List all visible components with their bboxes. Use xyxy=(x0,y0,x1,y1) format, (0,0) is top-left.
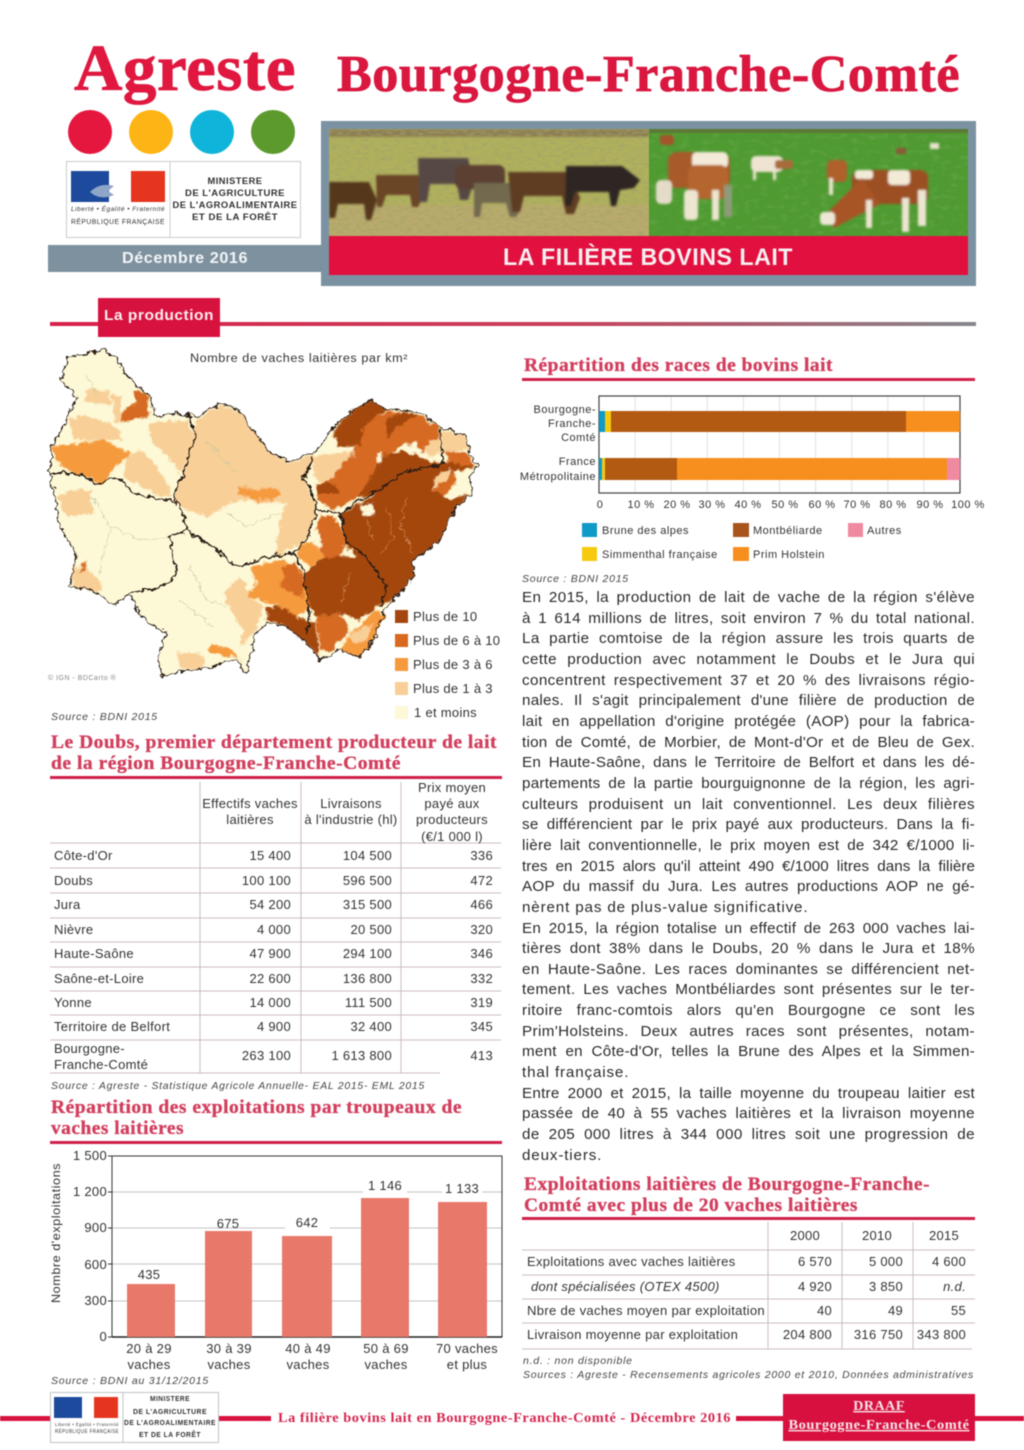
header panel xyxy=(321,121,976,286)
table: departments: Nièvre xyxy=(54,922,93,937)
photo: red and white cows xyxy=(649,129,968,236)
body text: concentrent respectivement 37 et 20 % des livraisons régio- xyxy=(522,672,975,689)
table: departments: 332 xyxy=(470,971,493,986)
section rule xyxy=(50,322,976,326)
stacked bar chart: breeds: 20 % xyxy=(663,499,691,511)
body text: nèrent pas de plus-value significative. xyxy=(522,899,808,916)
title: Bourgogne-Franche-Comté: Bourgogne-Franche-Comté xyxy=(337,46,960,103)
table: exploitations: 5 000 xyxy=(869,1254,903,1269)
table: exploitations: 4 600 xyxy=(932,1254,966,1269)
footer ministry logo: MINISTERE xyxy=(150,1396,190,1403)
table: exploitations: 2015 xyxy=(929,1228,959,1243)
band text: LA FILIÈRE BOVINS LAIT xyxy=(503,243,793,271)
table: departments: 111 500 xyxy=(345,995,392,1010)
table: departments: (€/1 000 l) xyxy=(421,829,483,844)
footer ministry logo: DE L'AGROALIMENTAIRE xyxy=(124,1420,216,1427)
bar chart: herds: 675 xyxy=(217,1216,239,1231)
table: exploitations xyxy=(522,1222,975,1349)
table: departments: 294 100 xyxy=(343,946,392,961)
body text: en Haute-Saône. Les races dominantes se différencient net- xyxy=(522,961,975,978)
title band xyxy=(329,236,968,275)
chart source: Source : BDNI au 31/12/2015 xyxy=(51,1375,209,1387)
table: exploitations: Livraison moyenne par exploitation xyxy=(527,1327,738,1342)
date band: Décembre 2016 xyxy=(122,250,248,267)
photo: grazing dark cows xyxy=(329,129,649,236)
body text: tement. Les vaches Montbéliardes sont présentes sur le ter- xyxy=(522,981,975,998)
table: departments: Haute-Saône xyxy=(54,946,134,961)
ministry logo box: RÉPUBLIQUE FRANÇAISE xyxy=(71,217,165,226)
table: departments: 472 xyxy=(470,873,493,888)
table: exploitations: 343 800 xyxy=(917,1327,966,1342)
stacked bar chart: breeds: 90 % xyxy=(916,499,944,511)
table: departments: Franche-Comté xyxy=(54,1057,148,1072)
ministry logo box: DE L'AGROALIMENTAIRE xyxy=(172,200,298,211)
bar chart: herds: vaches xyxy=(364,1357,408,1372)
table: exploitations: dont spécialisées (OTEX 4500) xyxy=(531,1279,720,1294)
bar chart: herds: et plus xyxy=(447,1357,487,1372)
table: departments: producteurs xyxy=(416,812,488,827)
body text: deux-tiers. xyxy=(522,1147,602,1164)
table: departments: 319 xyxy=(470,995,493,1010)
table: departments: Bourgogne- xyxy=(54,1041,125,1056)
table: departments: Effectifs vaches xyxy=(202,796,298,811)
section tag: La production xyxy=(98,298,220,337)
bar chart: herds: 20 à 29 xyxy=(126,1341,172,1356)
body text: passée de 40 à 55 vaches laitières et la livraison moyenne xyxy=(522,1105,975,1122)
footer title: La filière bovins lait en Bourgogne-Franche-Comté - Décembre 2016 xyxy=(278,1411,731,1426)
bar chart: herds: 40 à 49 xyxy=(285,1341,331,1356)
bar chart: herds: 600 xyxy=(84,1257,107,1272)
body text: partements de la partie bourguignonne de la région, les agri- xyxy=(522,775,975,792)
bar chart: herds: 1 133 xyxy=(445,1181,479,1196)
heading: exploitations: vaches laitières xyxy=(51,1118,184,1139)
table: departments xyxy=(50,780,501,1073)
table: departments: 15 400 xyxy=(249,848,291,863)
body text: Entre 2000 et 2015, la taille moyenne du troupeau laitier est xyxy=(522,1085,975,1102)
table: exploitations: 55 xyxy=(951,1303,966,1318)
table: departments: 263 100 xyxy=(242,1048,291,1063)
bar chart: herds: 50 à 69 xyxy=(363,1341,409,1356)
footer DRAAF box: DRAAF xyxy=(853,1399,905,1414)
stacked bar chart: breeds xyxy=(520,396,985,511)
table: departments: 20 500 xyxy=(350,922,392,937)
bar chart: herds: 642 xyxy=(296,1215,318,1230)
stacked bar chart: breeds: 50 % xyxy=(771,499,799,511)
body text: ritoire franc-comtois alors qu'en Bourgogne ce sont les xyxy=(522,1002,975,1019)
stacked bar chart: breeds: France xyxy=(559,456,596,468)
body text: lait en appellation d'origine protégée (AOP) pour la fabrica- xyxy=(522,713,975,730)
table: exploitations: 204 800 xyxy=(783,1327,832,1342)
stacked bar chart: breeds: 0 xyxy=(597,499,603,511)
table: departments: Jura xyxy=(54,897,81,912)
table: exploitations: 49 xyxy=(888,1303,903,1318)
bar chart: herds: 70 vaches xyxy=(436,1341,498,1356)
table: departments: Côte-d'Or xyxy=(54,848,113,863)
stacked bar chart: breeds: 80 % xyxy=(879,499,907,511)
table: departments: 596 500 xyxy=(343,873,392,888)
table: departments: 22 600 xyxy=(249,971,291,986)
table: departments: 466 xyxy=(470,897,493,912)
body text: tion de Comté, de Morbier, de Mont-d'Or et de Bleu de Gex. xyxy=(522,734,975,751)
breeds legend: Prim Holstein xyxy=(753,549,825,561)
table: exploitations: 2000 xyxy=(790,1228,820,1243)
breeds legend: Montbéliarde xyxy=(753,525,823,537)
bar chart: herds: 30 à 39 xyxy=(206,1341,252,1356)
table: departments: 4 000 xyxy=(257,922,291,937)
table notes: n.d. : non disponible xyxy=(523,1355,633,1367)
map legend: Plus de 3 à 6 xyxy=(413,657,493,672)
table notes xyxy=(523,1355,974,1381)
table: departments: 14 000 xyxy=(249,995,291,1010)
table: departments: Territoire de Belfort xyxy=(54,1019,170,1034)
footer rules xyxy=(0,1416,1024,1421)
body text: cette production avec notamment le Doubs et le Jura qui xyxy=(522,651,975,668)
table: departments: 47 900 xyxy=(249,946,291,961)
body text: ment en Côte-d'Or, telles la Brune des Alpes et la Simmen- xyxy=(522,1043,975,1060)
breeds legend: Simmenthal française xyxy=(602,549,718,561)
ministry logo box xyxy=(66,162,300,238)
table: departments: 320 xyxy=(470,922,493,937)
table: exploitations: n.d. xyxy=(943,1279,966,1294)
body text: AOP du massif du Jura. Les autres productions AOP ne gé- xyxy=(522,878,975,895)
heading: races: Répartition des races de bovins lait xyxy=(524,355,833,376)
table: departments: 413 xyxy=(470,1048,493,1063)
table: departments: Prix moyen xyxy=(418,780,486,795)
map legend: 1 et moins xyxy=(414,705,477,720)
ministry logo box: DE L'AGRICULTURE xyxy=(185,188,285,199)
map legend: Plus de 10 xyxy=(413,609,477,624)
table: departments: 1 613 800 xyxy=(331,1048,392,1063)
stacked bar chart: breeds: 70 % xyxy=(843,499,871,511)
heading rule: Doubs xyxy=(50,776,502,779)
table: departments: Saône-et-Loire xyxy=(54,971,144,986)
table: exploitations: Exploitations avec vaches laitières xyxy=(527,1254,736,1269)
footer DRAAF box: Bourgogne-Franche-Comté xyxy=(788,1418,970,1433)
heading rule: exploitations xyxy=(50,1141,502,1144)
body text: Prim'Holsteins. Deux autres races sont présentes, notam- xyxy=(522,1023,975,1040)
map title: Nombre de vaches laitières par km² xyxy=(190,353,408,365)
breeds legend: Autres xyxy=(867,525,902,537)
table: exploitations: 4 920 xyxy=(798,1279,832,1294)
table: departments: Yonne xyxy=(54,995,92,1010)
body text: culteurs produisent un lait conventionnel. Les deux filières xyxy=(522,796,975,813)
table: exploitations: 3 850 xyxy=(869,1279,903,1294)
table: exploitations: 2010 xyxy=(862,1228,892,1243)
heading: Doubs xyxy=(51,732,497,774)
table: departments: 346 xyxy=(470,946,493,961)
map legend: Plus de 1 à 3 xyxy=(413,681,493,696)
table source: Source : Agreste - Statistique Agricole Annuelle- EAL 2015- EML 2015 xyxy=(51,1080,425,1092)
table: exploitations: 316 750 xyxy=(854,1327,903,1342)
table: departments: 4 900 xyxy=(257,1019,291,1034)
body text: tres en 2015 alors qu'il atteint 490 €/1000 litres dans la filière xyxy=(522,858,975,875)
stacked bar chart: breeds: Bourgogne- xyxy=(534,404,596,416)
footer ministry logo: ET DE LA FORÊT xyxy=(139,1430,201,1439)
bar chart: herds: 300 xyxy=(84,1293,107,1308)
body text: nales. Il s'agit principalement d'une filière de production de xyxy=(522,692,975,709)
footer DRAAF box xyxy=(783,1394,975,1441)
heading: table exploitations xyxy=(524,1174,930,1216)
map legend xyxy=(395,609,500,720)
body text xyxy=(522,589,976,1164)
heading rule: table exploitations xyxy=(522,1217,975,1220)
heading rule: races xyxy=(522,378,975,381)
section tag: La production: La production xyxy=(104,307,214,324)
bar chart: herds: Nombre d'exploitations xyxy=(49,1163,63,1303)
table: departments: 136 800 xyxy=(343,971,392,986)
bar chart: herds: vaches xyxy=(208,1357,251,1372)
stacked bar chart: breeds: 10 % xyxy=(627,499,655,511)
coloured dots xyxy=(68,110,295,154)
footer ministry logo: DE L'AGRICULTURE xyxy=(133,1409,207,1416)
table: departments: Doubs xyxy=(54,873,93,888)
table: departments: payé aux xyxy=(424,796,480,811)
table: exploitations: 40 xyxy=(817,1303,832,1318)
body text: En 2015, la production de lait de vache de la région s'élève xyxy=(522,589,975,606)
footer ministry logo: RÉPUBLIQUE FRANÇAISE xyxy=(55,1428,119,1435)
bar chart: herds: vaches xyxy=(286,1357,330,1372)
stacked bar chart: breeds: Franche- xyxy=(548,418,596,430)
stacked bar chart: breeds: 60 % xyxy=(808,499,836,511)
breeds source: Source : BDNI 2015 xyxy=(522,573,629,585)
table: departments: 345 xyxy=(470,1019,493,1034)
table notes: Sources : Agreste - Recensements agricoles 2000 et 2010, Données administratives xyxy=(523,1369,974,1381)
footer ministry logo xyxy=(50,1392,218,1442)
title: Agreste: Agreste xyxy=(74,32,296,105)
heading: Doubs: Le Doubs, premier département producteur de lait xyxy=(51,732,497,753)
heading: exploitations: Répartition des exploitations par troupeaux de xyxy=(51,1097,462,1118)
footer ministry logo: Liberté • Égalité • Fraternité xyxy=(55,1421,119,1427)
body text: lière lait conventionnelle, le prix moyen est de 342 €/1000 li- xyxy=(522,837,975,854)
body text: tières dont 38% dans le Doubs, 20 % dans le Jura et 18% xyxy=(522,940,975,957)
table: departments: laitières xyxy=(226,812,274,827)
table: departments: 104 500 xyxy=(343,848,392,863)
ministry logo box: ET DE LA FORÊT xyxy=(192,211,278,223)
table: departments: 315 500 xyxy=(343,897,392,912)
body text: de 205 000 litres à 344 000 litres soit une progression de xyxy=(522,1126,975,1143)
heading: table exploitations: Exploitations laitières de Bourgogne-Franche- xyxy=(524,1174,930,1195)
table: departments: 336 xyxy=(470,848,493,863)
heading: table exploitations: Comté avec plus de 20 vaches laitières xyxy=(524,1195,858,1216)
breeds legend xyxy=(582,523,902,561)
bar chart: herds: 900 xyxy=(84,1220,107,1235)
stacked bar chart: breeds: Métropolitaine xyxy=(520,471,596,483)
date band xyxy=(48,245,322,272)
breeds legend: Brune des alpes xyxy=(602,525,689,537)
stacked bar chart: breeds: 100 % xyxy=(951,499,985,511)
ministry logo box: MINISTERE xyxy=(208,176,262,187)
body text: En Haute-Saône, dans le Territoire de Belfort et dans les dé- xyxy=(522,754,975,771)
stacked bar chart: breeds: Comté xyxy=(561,432,596,444)
map legend: Plus de 6 à 10 xyxy=(413,633,500,648)
table: departments: 100 100 xyxy=(242,873,291,888)
body text: à 1 614 millions de litres, soit environ 7 % du total national. xyxy=(522,610,975,627)
table: exploitations: Nbre de vaches moyen par exploitation xyxy=(527,1303,765,1318)
map: dairy cow density xyxy=(50,350,478,677)
body text: se différencient par le prix payé aux producteurs. Dans la fi- xyxy=(522,816,975,833)
table: departments: 32 400 xyxy=(350,1019,392,1034)
table: departments: à l'industrie (hl) xyxy=(304,812,398,827)
body text: La partie comtoise de la région assure les trois quarts de xyxy=(522,630,975,647)
bar chart: herds: 435 xyxy=(138,1267,160,1282)
stacked bar chart: breeds: 30 % xyxy=(698,499,726,511)
bar chart: herds: 1 200 xyxy=(73,1184,107,1199)
table: departments: 54 200 xyxy=(249,897,291,912)
table: departments: Livraisons xyxy=(320,796,382,811)
stacked bar chart: breeds: 40 % xyxy=(734,499,762,511)
body text: En 2015, la région totalise un effectif de 263 000 vaches lai- xyxy=(522,920,975,936)
bar chart: herds: vaches xyxy=(128,1357,171,1372)
ministry logo box: Liberté • Égalité • Fraternité xyxy=(71,204,165,213)
bar chart: herds xyxy=(49,1148,502,1372)
heading: Doubs: de la région Bourgogne-Franche-Comté xyxy=(51,753,401,774)
map credit: © IGN - BDCarto ® xyxy=(48,674,117,682)
bar chart: herds: 0 xyxy=(99,1329,107,1344)
body text: thal française. xyxy=(522,1064,629,1081)
bar chart: herds: 1 146 xyxy=(368,1178,402,1193)
bar chart: herds: 1 500 xyxy=(73,1148,107,1163)
table: exploitations: 6 570 xyxy=(798,1254,832,1269)
heading: exploitations xyxy=(51,1097,462,1139)
map source: Source : BDNI 2015 xyxy=(51,711,158,723)
